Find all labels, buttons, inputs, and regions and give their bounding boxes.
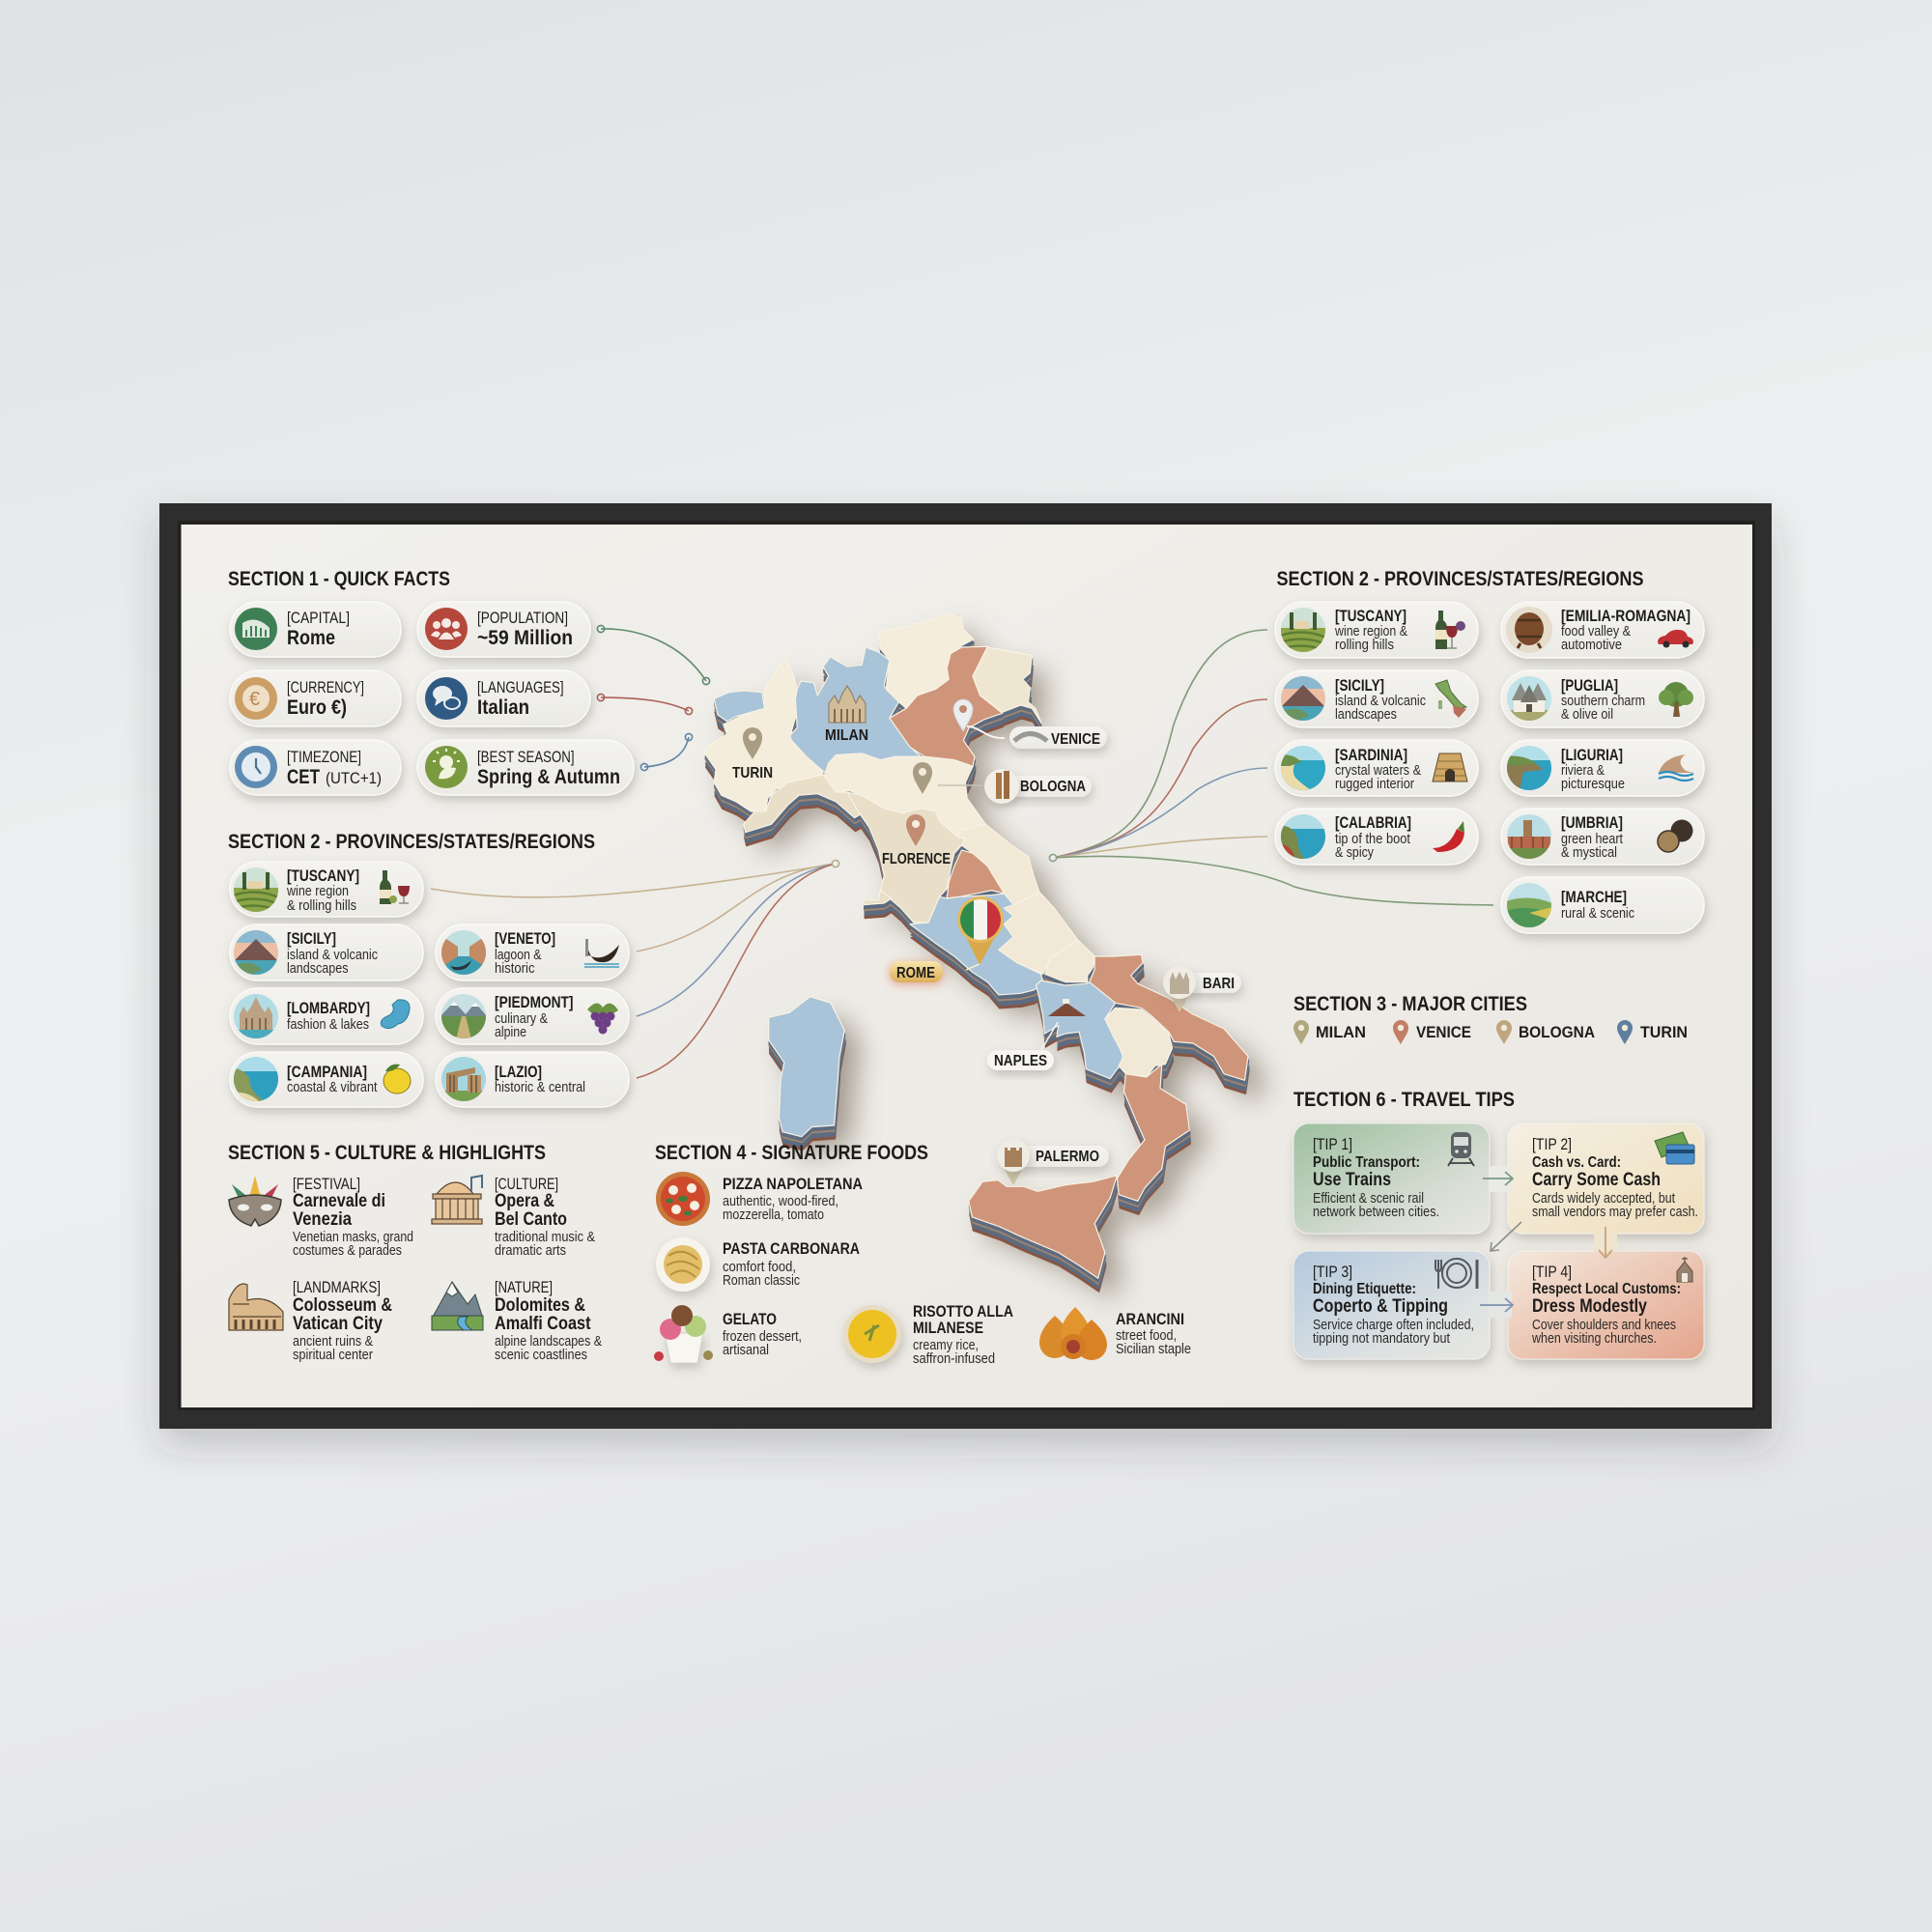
panel: Puglia: southern charm [1561, 694, 1645, 709]
panel: currency [230, 670, 401, 726]
panel: languages: [LANGUAGES] [477, 678, 564, 696]
tip 1 card: [TIP 1] [1313, 1135, 1352, 1153]
map marker: Palermo: PALERMO [1036, 1149, 1099, 1165]
food: risotto [843, 1302, 1013, 1367]
icon: gelato cup [654, 1305, 713, 1363]
culture item: landmarks [229, 1278, 392, 1363]
region: Piedmont [705, 659, 823, 811]
panel: Veneto [436, 924, 629, 980]
panel: Veneto: [VENETO] [495, 929, 555, 948]
icon: speech bubbles [425, 677, 468, 720]
icon: cash and card [1655, 1132, 1694, 1164]
food: pizza: PIZZA NAPOLETANA [723, 1175, 863, 1193]
icon: Tuscan hills scene [233, 867, 279, 913]
panel: Tuscany right: wine region & [1334, 624, 1407, 639]
major cities legend: TURIN [1640, 1023, 1688, 1041]
panel: population: ~59 Million [477, 627, 573, 649]
icon: trulli scene [1506, 675, 1552, 722]
culture item: opera: dramatic arts [495, 1243, 566, 1259]
tip 3 card: Dining Etiquette: [1313, 1281, 1416, 1297]
major cities legend [1293, 1020, 1688, 1044]
panel: capital: Rome [287, 627, 335, 649]
map marker: Bari: BARI [1203, 976, 1235, 992]
region: Veneto [890, 646, 1003, 766]
icon: riviera scene [1506, 745, 1552, 791]
tip 4 card: when visiting churches. [1531, 1331, 1657, 1347]
panel: capital [230, 602, 401, 657]
food: risotto: MILANESE [913, 1319, 983, 1337]
culture item: nature: [NATURE] [495, 1278, 553, 1296]
icon: euro coin: € [249, 689, 260, 710]
food: pizza [656, 1172, 863, 1226]
tip 4 card: [TIP 4] [1532, 1263, 1572, 1281]
food: risotto: creamy rice, [913, 1338, 979, 1353]
arrow: tip 2 to tip 4 [1594, 1227, 1617, 1258]
panel: timezone: CET [287, 766, 320, 788]
icon: nuraghe [1433, 753, 1467, 781]
icon: wine bottle and glass [380, 870, 410, 904]
panel: population: [POPULATION] [477, 609, 568, 627]
icon: beach scene [1280, 745, 1326, 791]
culture item: opera: traditional music & [495, 1230, 595, 1245]
map regions [705, 613, 1248, 1278]
culture item: nature: alpine landscapes & [495, 1334, 602, 1350]
icon: lemon [384, 1065, 411, 1094]
icon: lake [381, 1000, 410, 1029]
region: Emilia-Romagna [823, 753, 985, 838]
region: Basilicata [1105, 1008, 1173, 1077]
culture item: nature: Amalfi Coast [495, 1313, 591, 1334]
region: Campania [1036, 980, 1122, 1079]
panel: Tuscany left: wine region [286, 884, 349, 899]
culture item: opera [432, 1175, 595, 1259]
panel: Marche right: [MARCHE] [1561, 888, 1627, 906]
panel: Emilia-Romagna [1501, 602, 1704, 658]
panel: Marche right [1501, 877, 1704, 933]
culture item: nature [432, 1278, 602, 1363]
panel: best season: Spring & Autumn [477, 766, 620, 788]
panel: Sicily right [1275, 670, 1478, 727]
icon: church [1677, 1257, 1692, 1282]
panel: Sicily right: island & volcanic [1335, 694, 1426, 709]
icon: risotto bowl [843, 1305, 901, 1363]
map marker: Rome flag pin [890, 896, 1004, 982]
panel: currency: Euro €) [287, 696, 347, 719]
culture item: landmarks: spiritual center [293, 1348, 373, 1363]
culture item: opera: Opera & [495, 1190, 554, 1211]
icon: Milan cathedral scene [233, 993, 279, 1039]
food: carbonara [656, 1237, 860, 1292]
panel: languages [417, 670, 590, 726]
icon: colosseum [229, 1284, 283, 1330]
tip 3 card: Service charge often included, [1313, 1318, 1474, 1333]
panel: Veneto: historic [495, 961, 535, 977]
icon: chili pepper [1433, 821, 1464, 852]
tip 1 card: network between cities. [1313, 1205, 1439, 1220]
region: Lombardy [790, 647, 921, 775]
icon: Venice canal scene [440, 929, 487, 976]
panel: Tuscany right: rolling hills [1335, 638, 1394, 653]
region: Umbria [947, 850, 1005, 898]
icon: grapes [587, 1003, 618, 1034]
panel: Liguria: picturesque [1561, 777, 1625, 792]
culture item: festival: Venetian masks, grand [293, 1230, 413, 1245]
food: gelato: GELATO [723, 1310, 777, 1328]
culture item: landmarks: ancient ruins & [293, 1334, 373, 1350]
icon: gondola [584, 939, 619, 967]
region: Abruzzo [999, 892, 1078, 974]
panel: Calabria: tip of the boot [1335, 832, 1410, 847]
section 6 heading: TECTION 6 - TRAVEL TIPS [1293, 1089, 1515, 1111]
icon: red car [1658, 630, 1693, 647]
tip 2 card: small vendors may prefer cash. [1532, 1205, 1698, 1220]
map marker: Florence: FLORENCE [882, 851, 951, 867]
tip 3 card: [TIP 3] [1313, 1263, 1352, 1281]
section 3 heading: SECTION 3 - MAJOR CITIES [1293, 993, 1527, 1015]
panel: Piedmont: [PIEDMONT] [495, 993, 574, 1011]
region: Puglia [1090, 954, 1248, 1080]
food: risotto: RISOTTO ALLA [913, 1302, 1013, 1321]
panel: Sicily right: landscapes [1335, 707, 1397, 723]
map marker: Naples: NAPLES [994, 1053, 1047, 1069]
panel: Umbria: & mystical [1561, 845, 1617, 861]
connector lines: left regions [431, 860, 839, 1078]
panel: Lazio: historic & central [495, 1080, 585, 1095]
culture item: festival: costumes & parades [293, 1243, 402, 1259]
culture item: landmarks: Colosseum & [293, 1294, 392, 1316]
map marker: Turin: TURIN [732, 765, 773, 781]
panel: Sardinia: crystal waters & [1335, 763, 1421, 779]
Tuscan islet [864, 891, 892, 905]
map marker: Turin [732, 727, 773, 781]
icon: train [1448, 1132, 1474, 1166]
food: arancini [1039, 1307, 1191, 1360]
icon: hill town scene [1506, 813, 1552, 860]
major cities legend: MILAN [1316, 1023, 1366, 1041]
food: arancini: street food, [1116, 1328, 1177, 1344]
panel: Umbria: green heart [1561, 832, 1623, 847]
map marker: Bologna [913, 762, 1092, 804]
arrow: tip 3 to tip 4 [1480, 1292, 1513, 1318]
food: gelato: artisanal [723, 1343, 769, 1358]
tip 1 card: Efficient & scenic rail [1313, 1191, 1424, 1207]
icon: Tuscan hills scene [1280, 607, 1326, 653]
panel: Sardinia: rugged interior [1335, 777, 1414, 792]
panel: Sardinia: [SARDINIA] [1335, 746, 1407, 764]
map marker: Rome flag pin: ROME [896, 965, 935, 981]
map marker: Bologna: BOLOGNA [1020, 779, 1086, 795]
tip 3 card: Coperto & Tipping [1313, 1295, 1448, 1317]
map of Italy [705, 613, 1264, 1297]
map marker: Milan [825, 686, 868, 744]
panel: Veneto: lagoon & [495, 948, 542, 963]
culture item: festival: [FESTIVAL] [293, 1175, 360, 1193]
region: Molise [1045, 940, 1094, 982]
panel: Lazio: [LAZIO] [495, 1063, 542, 1081]
food: pizza: authentic, wood-fired, [723, 1194, 838, 1209]
icon: mountains and river [432, 1282, 483, 1330]
culture item: festival [229, 1175, 413, 1259]
connector lines: quick facts [597, 625, 710, 771]
panel: Piedmont: culinary & [495, 1011, 548, 1027]
pin: Milan [1293, 1020, 1309, 1044]
icon: opera house [432, 1182, 482, 1224]
section 1 heading: SECTION 1 - QUICK FACTS [228, 568, 450, 590]
food: carbonara: PASTA CARBONARA [723, 1239, 860, 1258]
panel: currency: [CURRENCY] [287, 678, 364, 696]
panel: Liguria [1501, 740, 1704, 796]
icon: carnival mask [229, 1176, 281, 1226]
icon: pasta plate [656, 1237, 710, 1292]
panel: Lombardy: fashion & lakes [287, 1017, 369, 1033]
tip 2 card: [TIP 2] [1532, 1135, 1572, 1153]
panel: Emilia-Romagna: [EMILIA-ROMAGNA] [1561, 607, 1690, 625]
panel: Liguria: riviera & [1561, 763, 1605, 779]
section 2 heading, right: SECTION 2 - PROVINCES/STATES/REGIONS [1277, 568, 1644, 590]
tip 4 card [1508, 1251, 1704, 1359]
icon: Calabrian coast scene [1280, 813, 1326, 860]
pin: Bologna [1496, 1020, 1512, 1044]
region: Aosta [714, 691, 765, 722]
panel: Sicily left: landscapes [287, 961, 348, 977]
pin: Venice [1393, 1020, 1408, 1044]
tip 3 card: tipping not mandatory but [1313, 1331, 1450, 1347]
northern and central regions [705, 613, 1094, 995]
food: gelato: frozen dessert, [723, 1329, 802, 1345]
panel: Lombardy [230, 988, 423, 1044]
panel: timezone: (UTC+1) [326, 769, 382, 787]
panel: Sardinia [1275, 740, 1478, 796]
culture item: landmarks: [LANDMARKS] [293, 1278, 381, 1296]
major cities legend: VENICE [1416, 1023, 1471, 1041]
panel: Puglia: & olive oil [1561, 707, 1613, 723]
culture item: opera: [CULTURE] [495, 1175, 558, 1193]
food: risotto: saffron-infused [913, 1351, 995, 1367]
culture item: landmarks: Vatican City [293, 1313, 383, 1334]
icon: alpine vineyard scene [440, 993, 487, 1039]
panel: Lombardy: [LOMBARDY] [287, 999, 370, 1017]
panel: Marche right: rural & scenic [1561, 906, 1634, 922]
culture item: opera: Bel Canto [495, 1208, 567, 1230]
culture item: nature: Dolomites & [495, 1294, 585, 1316]
section 5 heading: SECTION 5 - CULTURE & HIGHLIGHTS [228, 1142, 546, 1164]
panel: Lazio [436, 1052, 629, 1107]
region: Marche [958, 824, 1039, 905]
pin: Turin [1617, 1020, 1633, 1044]
panel: Calabria: [CALABRIA] [1335, 813, 1411, 832]
icon: colosseum [235, 608, 277, 650]
tip 1 card [1293, 1123, 1490, 1234]
icon: plate and cutlery [1435, 1259, 1477, 1289]
southern regions and islands [769, 954, 1248, 1278]
panel: Campania: coastal & vibrant [287, 1080, 377, 1095]
arrow: tip 2 to tip 3 [1491, 1222, 1521, 1251]
panel: population [417, 602, 590, 657]
food: arancini: Sicilian staple [1116, 1342, 1191, 1357]
region: Calabria [1117, 1065, 1189, 1201]
food: pizza: mozzerella, tomato [723, 1208, 824, 1223]
icon: sun and leaf [425, 746, 468, 788]
panel: Sicily left: island & volcanic [287, 948, 378, 963]
tip 1 card: Public Transport: [1313, 1154, 1420, 1171]
panel: Calabria: & spicy [1335, 845, 1375, 861]
panel: Calabria [1275, 809, 1478, 865]
major cities legend: BOLOGNA [1519, 1023, 1595, 1041]
food: gelato [654, 1305, 802, 1363]
icon: volcano scene [233, 929, 279, 976]
map marker: Naples [987, 999, 1086, 1070]
map marker: Milan: MILAN [825, 727, 868, 744]
picture frame [159, 503, 1772, 1429]
map marker: Venice [953, 699, 1107, 749]
icon: truffles [1658, 819, 1692, 852]
food: arancini: ARANCINI [1116, 1310, 1184, 1328]
paper panel [182, 525, 1752, 1407]
icon: people [425, 608, 468, 650]
region: Trentino [879, 613, 974, 708]
icon: music note [471, 1176, 482, 1192]
tip 4 card: Respect Local Customs: [1532, 1281, 1681, 1297]
region: Lazio [910, 894, 1043, 995]
panel: best season [417, 740, 634, 795]
icon: volcano scene [1280, 675, 1326, 722]
icon: pizza [656, 1172, 710, 1226]
tip 2 card: Carry Some Cash [1532, 1169, 1661, 1190]
arrow: tip 1 to tip 2 [1483, 1166, 1513, 1192]
tip 4 card: Cover shoulders and knees [1532, 1318, 1676, 1333]
panel: Tuscany right: [TUSCANY] [1335, 607, 1406, 625]
panel: Umbria: [UMBRIA] [1561, 813, 1623, 832]
panel: Sicily left [230, 924, 423, 980]
region: Sicily [969, 1176, 1117, 1278]
panel: timezone: [TIMEZONE] [287, 748, 361, 766]
panel: best season: [BEST SEASON] [477, 748, 574, 766]
panel: Sicily left: [SICILY] [287, 929, 336, 948]
icon: barrel [1506, 607, 1552, 653]
icon: mini Italy [1435, 680, 1466, 718]
panel: Piedmont [436, 988, 629, 1044]
panel: Piedmont: alpine [495, 1025, 526, 1040]
tip 1 card: Use Trains [1313, 1169, 1391, 1190]
panel: capital: [CAPITAL] [287, 609, 350, 627]
icon: rolling fields scene [1506, 882, 1552, 928]
tip 4 card: Dress Modestly [1532, 1295, 1647, 1317]
panel: Emilia-Romagna: food valley & [1561, 624, 1631, 639]
tip 2 card: Cash vs. Card: [1532, 1154, 1621, 1171]
panel: Campania [230, 1052, 423, 1107]
panel: Puglia: [PUGLIA] [1561, 676, 1618, 695]
region: Sardinia [769, 997, 844, 1137]
section 4 heading: SECTION 4 - SIGNATURE FOODS [655, 1142, 928, 1164]
panel: Puglia [1501, 670, 1704, 727]
panel: Tuscany left: & rolling hills [287, 898, 356, 914]
map marker: Venice: VENICE [1051, 731, 1100, 748]
panel: Tuscany left: [TUSCANY] [287, 867, 359, 885]
icon: clock [235, 746, 277, 788]
region: Liguria [744, 775, 860, 833]
panel: timezone [230, 740, 401, 795]
map marker: Florence [882, 814, 951, 867]
icon: wine bottle and glass [1435, 611, 1465, 649]
food: carbonara: Roman classic [723, 1273, 800, 1289]
section 2 heading, left: SECTION 2 - PROVINCES/STATES/REGIONS [228, 831, 595, 853]
connector lines: right regions [1049, 630, 1493, 905]
icon: Roman ruins scene [440, 1056, 487, 1102]
panel: Campania: [CAMPANIA] [287, 1063, 367, 1081]
panel: Liguria: [LIGURIA] [1561, 746, 1623, 764]
tip 2 card [1508, 1123, 1704, 1234]
region: Friuli [973, 647, 1041, 723]
panel: Sicily right: [SICILY] [1335, 676, 1384, 695]
icon: wave [1659, 754, 1693, 781]
culture item: festival: Carnevale di [293, 1190, 385, 1211]
tip 2 card: Cards widely accepted, but [1532, 1191, 1675, 1207]
panel: Tuscany left [230, 862, 423, 917]
map marker: Palermo [997, 1139, 1109, 1185]
panel: Emilia-Romagna: automotive [1561, 638, 1622, 653]
tip 3 card [1293, 1251, 1490, 1359]
region: Tuscany [847, 792, 965, 923]
panel: languages: Italian [477, 696, 529, 719]
icon: olive tree [1659, 682, 1693, 717]
icon: euro coin [235, 677, 277, 720]
culture item: nature: scenic coastlines [495, 1348, 587, 1363]
panel: Tuscany right [1275, 602, 1478, 658]
culture item: festival: Venezia [293, 1208, 352, 1230]
icon: arancini [1039, 1307, 1107, 1360]
icon: Amalfi coast scene [233, 1056, 279, 1102]
food: carbonara: comfort food, [723, 1260, 796, 1275]
panel: Umbria [1501, 809, 1704, 865]
map marker: Bari [1163, 966, 1241, 1012]
